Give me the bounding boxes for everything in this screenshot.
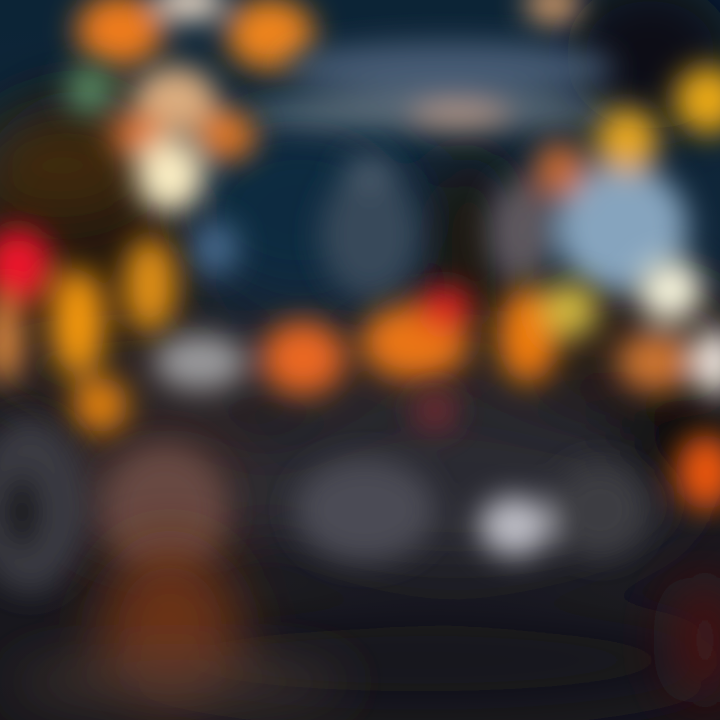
pale grey card <box>479 496 551 556</box>
title highlight <box>412 105 508 131</box>
orange blob <box>261 321 345 395</box>
peach blob <box>617 332 693 392</box>
yellow light far right <box>674 66 720 134</box>
orange red light <box>676 434 720 510</box>
amber bar right <box>123 237 177 333</box>
peach light top right <box>525 0 581 26</box>
pale orange edge <box>0 296 22 384</box>
small blue figure <box>191 220 239 276</box>
orange head <box>534 142 586 198</box>
dim red mark <box>413 388 457 432</box>
blurred caption <box>10 664 350 700</box>
amber bar <box>51 268 105 376</box>
white light top <box>156 0 224 20</box>
red light <box>0 228 52 304</box>
panel: middle row lights <box>154 259 720 396</box>
white edge blob <box>694 328 720 396</box>
dark grey card <box>552 462 648 558</box>
orange drop <box>72 377 128 433</box>
dark slot <box>6 474 38 550</box>
blue figure <box>320 171 420 299</box>
orange column <box>498 287 558 383</box>
orange petal right <box>196 109 256 161</box>
olive yellow blob <box>542 282 598 338</box>
panel: top header bokeh <box>76 0 720 134</box>
yellow light <box>595 108 659 172</box>
icon: flower cluster <box>66 66 256 212</box>
peach petal <box>133 66 217 134</box>
grey arm <box>488 180 552 284</box>
pale grey blob <box>154 334 246 390</box>
white blob <box>638 259 702 321</box>
wide orange blob <box>361 304 469 380</box>
red blob <box>417 286 473 330</box>
panel: bottom cards <box>0 388 720 593</box>
dark red corner <box>671 575 720 705</box>
panel: centre blue figures <box>191 156 420 299</box>
orange light right <box>226 0 314 70</box>
orange petal left <box>110 113 166 157</box>
blue figure head <box>344 156 396 188</box>
green petal <box>66 66 114 114</box>
light blue shirt <box>556 164 688 292</box>
panel: bottom strip <box>10 545 720 715</box>
panel: person on right <box>488 108 688 292</box>
brown card <box>103 444 227 576</box>
bright core <box>136 140 204 212</box>
left grey card <box>0 417 88 593</box>
panel: left warm lights <box>0 228 177 433</box>
title line one <box>285 42 615 94</box>
brown glow <box>100 545 240 715</box>
heading: blurred title band <box>245 42 615 131</box>
grey card <box>295 458 435 562</box>
title line two <box>245 94 615 130</box>
orange light left <box>76 0 164 66</box>
